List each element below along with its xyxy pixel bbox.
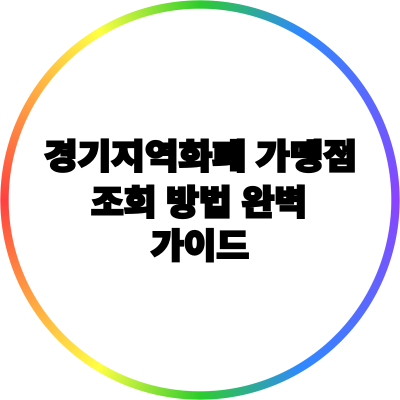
title: 경기지역화폐 가맹점 <box>44 138 357 176</box>
title: 조회 방법 완벽 <box>91 184 307 222</box>
title: 가이드 <box>151 228 249 266</box>
